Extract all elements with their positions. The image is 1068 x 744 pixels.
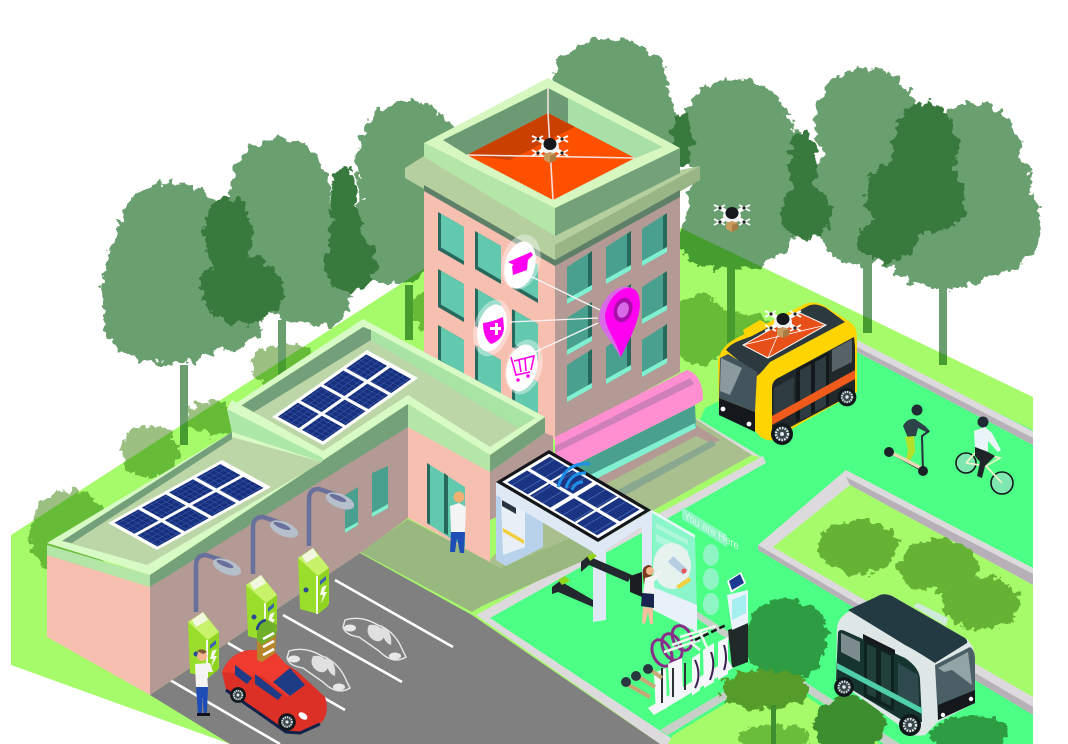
kerb strip — [690, 610, 900, 744]
lime lawn — [773, 485, 1033, 697]
red car — [222, 620, 327, 733]
parking symbol — [287, 649, 350, 691]
car charge indicator — [257, 620, 277, 662]
shuttle side — [772, 337, 855, 437]
pink awning — [555, 370, 720, 498]
kerb: left of lawn — [476, 456, 766, 744]
bike frames — [664, 626, 716, 652]
step wall — [227, 400, 325, 458]
low building — [47, 319, 553, 695]
dock accents — [695, 645, 726, 688]
parapet faces — [424, 143, 555, 236]
long side wall — [150, 425, 408, 695]
pink end wall — [47, 555, 150, 695]
side windows — [345, 466, 388, 533]
road surface — [480, 338, 1033, 744]
EV charger — [298, 548, 329, 614]
location icons — [467, 230, 640, 399]
awning mint stripe — [580, 423, 696, 482]
cyclist — [956, 416, 1013, 494]
ad panel — [496, 487, 543, 566]
You are Here sign: You are Here — [684, 509, 739, 553]
tower left windows — [438, 212, 538, 420]
tower walls — [424, 190, 555, 440]
light tree crowns — [102, 39, 1042, 364]
parking lines — [170, 580, 453, 744]
scooter posts — [662, 663, 685, 703]
background bushes — [30, 286, 775, 580]
shuttle windscreen — [719, 354, 757, 412]
parapet rim — [424, 78, 680, 208]
shuttle roof — [726, 305, 845, 376]
kick scooters — [621, 664, 662, 697]
right margin mask — [1033, 395, 1068, 744]
asphalt parking — [150, 553, 660, 744]
board header bars — [656, 523, 688, 545]
rental kiosk — [727, 572, 748, 668]
handlebar bar — [695, 625, 726, 640]
shuttle side — [836, 630, 922, 722]
dark tree crowns — [200, 102, 966, 324]
parking symbol — [343, 618, 406, 660]
lower roof deck — [62, 437, 322, 565]
solar shelter — [496, 450, 652, 622]
plaza kerb — [694, 418, 763, 458]
shuttle stripe — [837, 663, 922, 714]
shuttle stripe — [772, 370, 855, 425]
right side band of door wing — [490, 417, 545, 472]
white shuttle — [834, 594, 975, 736]
person charging — [195, 649, 213, 716]
yellow shuttle — [718, 303, 857, 445]
information board — [652, 507, 739, 632]
board base — [653, 587, 697, 632]
flying drone — [714, 205, 750, 232]
orange roof — [467, 113, 635, 200]
shuttle roof pad — [743, 313, 826, 358]
shuttle body — [836, 594, 975, 736]
back kerb — [857, 340, 1033, 445]
scooter rider — [884, 404, 930, 476]
tower — [405, 78, 700, 440]
lawn bushes — [818, 520, 1020, 629]
trees behind buildings — [30, 39, 1042, 580]
shelter beam — [496, 482, 652, 555]
shuttle body — [718, 303, 857, 440]
upper roof deck — [239, 327, 535, 453]
rack base — [648, 660, 733, 715]
rack docks — [654, 668, 667, 713]
drone on shuttle — [765, 311, 801, 338]
door wall — [408, 427, 490, 562]
awning teal band — [555, 405, 696, 483]
person at door — [450, 492, 466, 553]
plaza — [360, 415, 752, 612]
rim faces — [47, 545, 150, 587]
front post — [593, 545, 606, 622]
ground plane — [11, 175, 1033, 744]
lawn block — [758, 470, 1033, 715]
solar panel: upper roof — [272, 350, 418, 445]
tower right windows — [567, 213, 667, 402]
EV charger — [188, 612, 219, 678]
awning roof — [555, 370, 703, 475]
shuttle wheels — [771, 423, 793, 445]
lower tree — [721, 598, 1008, 744]
cart icon — [499, 335, 549, 399]
lower lime lawn — [668, 675, 880, 744]
shelter solar roof — [496, 450, 651, 542]
charger lamp — [196, 555, 244, 612]
roof markings — [467, 88, 635, 200]
shuttle roof — [848, 594, 967, 663]
sign icons — [703, 544, 719, 615]
map pin — [599, 287, 640, 357]
wifi icon — [558, 464, 590, 490]
steps — [600, 436, 716, 497]
back kerb shadow — [857, 347, 1033, 445]
lower kerbs and lawn — [660, 598, 1008, 744]
parapet inner walls — [443, 88, 548, 155]
benches — [552, 553, 642, 607]
eave slab — [405, 156, 700, 264]
solar panel: lower roof — [108, 460, 271, 550]
awning base wall — [560, 425, 720, 498]
lower roof back wall — [62, 432, 232, 543]
door — [427, 463, 465, 548]
shuttle wheels — [834, 677, 854, 697]
board face — [652, 510, 697, 617]
rear post — [642, 517, 652, 575]
board map — [653, 543, 691, 589]
shuttle windscreen — [935, 647, 975, 720]
EV charger — [246, 575, 277, 641]
plaza darker walkway — [360, 519, 596, 612]
charger lamp — [309, 489, 357, 546]
roof rim — [47, 319, 545, 575]
graduation icon — [495, 230, 547, 294]
charger lamp — [253, 517, 301, 574]
lawn kerb — [758, 470, 1033, 713]
drone on roof — [532, 136, 568, 163]
bike rack — [621, 622, 733, 715]
tree trunks — [180, 255, 947, 445]
bike wheels — [648, 622, 696, 669]
connector lines — [510, 275, 600, 352]
health shield icon — [467, 295, 517, 361]
lower tree trunk — [771, 705, 776, 744]
lower kerb — [660, 664, 774, 735]
person at board — [641, 565, 662, 624]
upper roof back wall — [239, 327, 371, 415]
